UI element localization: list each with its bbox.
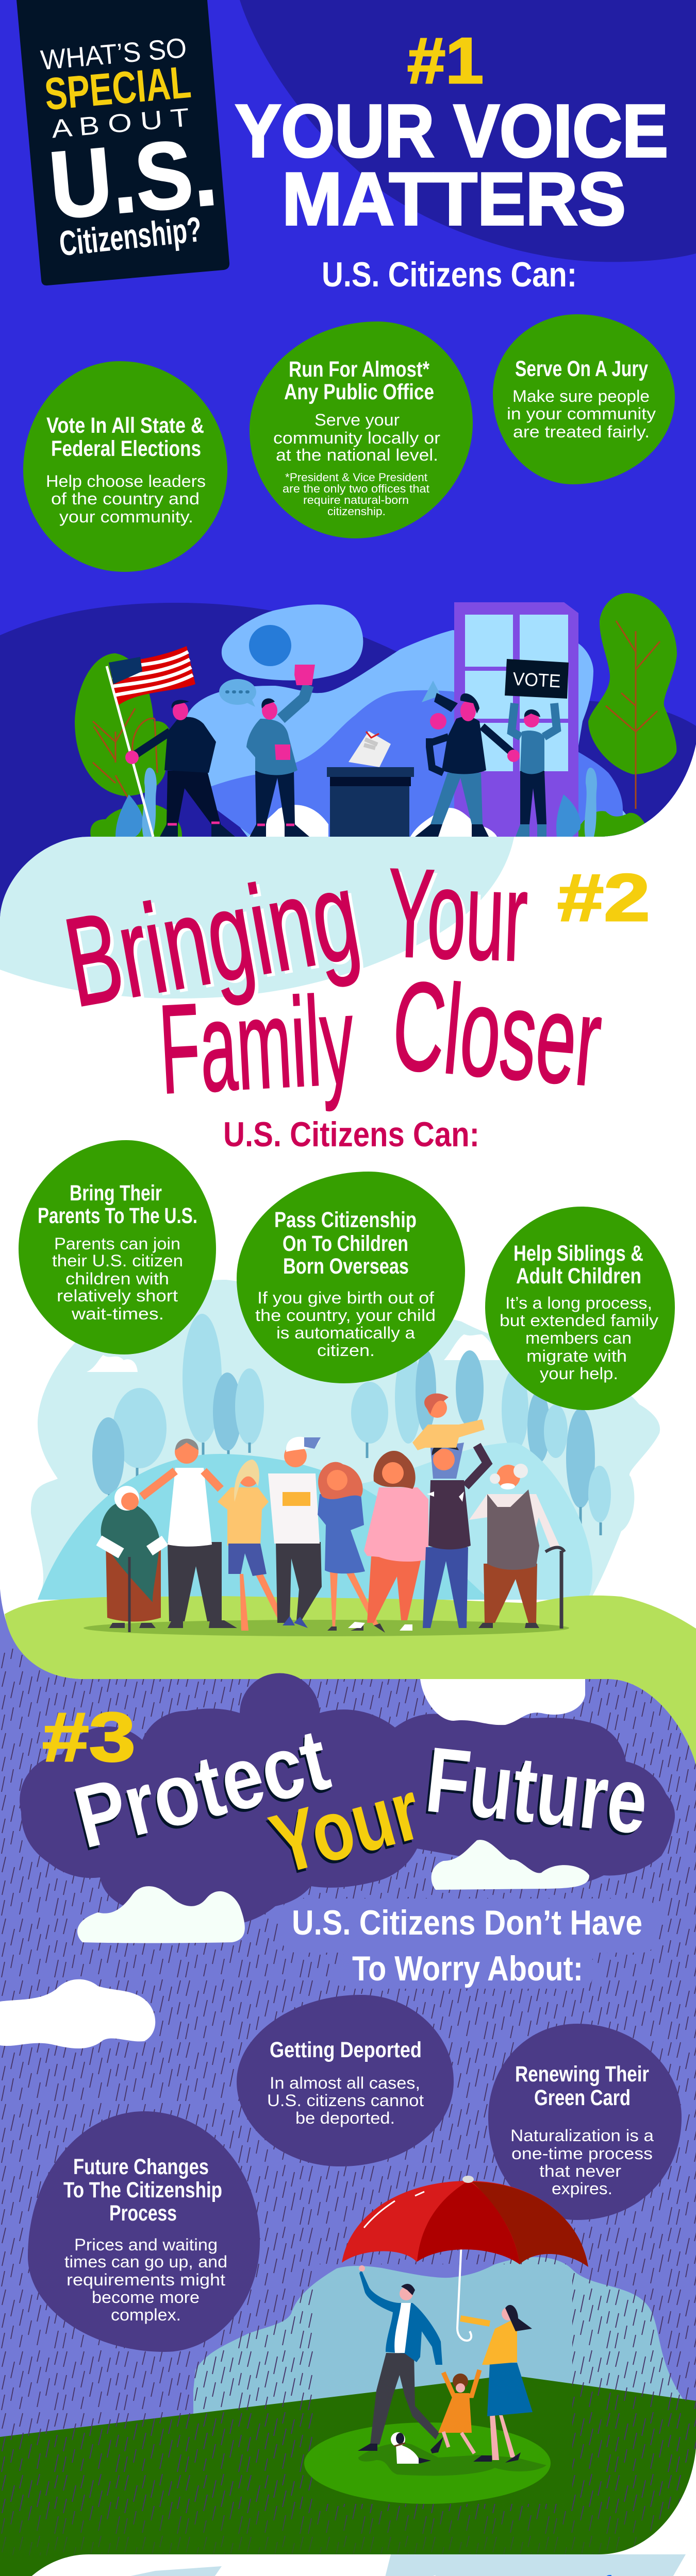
body text: If you give birth out of (257, 1289, 434, 1307)
heading: Born Overseas (283, 1254, 409, 1279)
body text: Prices and waiting (74, 2235, 218, 2254)
heading: Help Siblings & (513, 1241, 643, 1266)
heading: Serve On A Jury (515, 357, 648, 381)
body text (64, 2235, 227, 2324)
body text: requirements might (67, 2270, 225, 2289)
title line: citizenship: Citizenship? (57, 210, 204, 263)
body text (500, 1294, 658, 1383)
heading: Green Card (534, 2086, 631, 2110)
body text (510, 2126, 654, 2198)
panel: section 3 protect your future background (0, 1571, 696, 2576)
blonde girl (218, 1460, 284, 1631)
child (438, 2370, 479, 2453)
heading: Future Changes (73, 2155, 209, 2179)
heading: Renewing Their (515, 2062, 649, 2087)
heading: your voice matters: YOUR VOICE (235, 89, 668, 173)
body text (52, 1234, 183, 1323)
heading: protect your future: Your (260, 1765, 429, 1895)
number 2: #2 (557, 860, 650, 935)
number 3: #3 (42, 1698, 136, 1776)
heading: bringing your family closer: Your (385, 841, 530, 988)
heading: bringing your family closer: Bringing (59, 846, 372, 1036)
heading: Parents To The U.S. (38, 1204, 197, 1228)
subheading: citizens can: U.S. Citizens Can: (223, 1115, 479, 1154)
body text: of the country and (51, 489, 200, 508)
number 1: #1 (407, 24, 484, 97)
heading (46, 413, 204, 461)
woman in blue dress (318, 1462, 385, 1633)
cloud: right of heading (432, 1840, 589, 1890)
person with raised fist (246, 665, 315, 837)
vote sign: VOTE (512, 668, 561, 691)
pale blue blob behind heading (0, 835, 515, 998)
lawn shadow (358, 2443, 546, 2476)
title line: U.S.: U.S. (45, 119, 221, 239)
heading: On To Children (283, 1231, 408, 1256)
illustration: family under umbrella (342, 2176, 588, 2464)
person with megaphone (415, 681, 520, 837)
heading: Any Public Office (284, 380, 434, 404)
light blue wave (187, 630, 644, 837)
dog (391, 2432, 431, 2464)
woman (460, 2305, 533, 2463)
ground shadow (84, 1620, 569, 1636)
body text: that never (539, 2162, 621, 2180)
heading: Pass Citizenship (274, 1208, 417, 1232)
heading: protect your future: Your (261, 1762, 430, 1892)
heading: protect your future: Protect (64, 1713, 337, 1870)
heading: protect your future (64, 1710, 653, 1895)
body text: Parents can join (54, 1234, 180, 1253)
body text: in your community (507, 404, 656, 423)
white bumps (248, 805, 497, 837)
subheading: don't have to worry: To Worry About: (352, 1949, 583, 1988)
speech bubble (219, 679, 256, 707)
body text: U.S. citizens cannot (267, 2091, 424, 2110)
body text: Make sure people (512, 387, 650, 405)
leaves (115, 794, 581, 837)
cloud: top (420, 1679, 585, 1725)
callout: public office (250, 321, 473, 538)
man with cap (268, 1437, 322, 1628)
heading: Vote In All State & (46, 413, 204, 438)
tree right (588, 593, 677, 809)
callout: getting deported (237, 1995, 454, 2166)
man (358, 2265, 443, 2453)
footnote: *President & Vice President (285, 471, 427, 484)
body text (267, 2074, 424, 2127)
blue spot (249, 625, 291, 666)
body text: the country, your child (255, 1306, 436, 1325)
title line: special: SPECIAL (43, 56, 193, 120)
body text: migrate with (526, 1347, 627, 1365)
callout: pass citizenship (237, 1172, 465, 1383)
heading: bringing your family closer (56, 841, 607, 1120)
body text (46, 472, 206, 526)
heading: bringing your family closer: Family (156, 969, 357, 1120)
title card (16, 0, 229, 285)
heading: Federal Elections (51, 436, 201, 461)
heading (63, 2155, 222, 2226)
callout: future changes (28, 2111, 260, 2352)
storm cloud behind heading (20, 1673, 675, 1927)
ballot box (327, 731, 414, 837)
body text: members can (525, 1329, 632, 1347)
vote sign (505, 659, 569, 699)
grandfather (469, 1464, 565, 1629)
umbrella (342, 2176, 588, 2341)
small clouds (87, 1334, 502, 1372)
light blue cloud blob (222, 604, 363, 681)
body text: times can go up, and (64, 2252, 227, 2271)
tree left (75, 653, 171, 809)
lime ground (5, 1596, 696, 1765)
heading: your voice matters: MATTERS (282, 157, 626, 241)
footnote: require natural-born (303, 494, 409, 506)
callout: siblings (485, 1207, 675, 1410)
illustration: family group (99, 1394, 565, 1633)
body text: expires. (552, 2179, 612, 2198)
body text (507, 387, 656, 441)
heading (38, 1181, 197, 1228)
heading: bringing your family closer: Your (388, 845, 533, 991)
bushes (90, 804, 650, 837)
callout: jury (493, 314, 675, 484)
body text: their U.S. citizen (52, 1251, 183, 1270)
body text: your help. (540, 1364, 618, 1383)
heading: Run For Almost* (289, 357, 429, 382)
flag with pole (107, 646, 195, 837)
panel: section 2 white background (0, 721, 696, 1765)
man with child on shoulders (412, 1394, 487, 1628)
body text: wait-times. (71, 1304, 164, 1323)
subheading: don't have to worry (292, 1903, 642, 1988)
heading: Adult Children (516, 1264, 641, 1289)
body text: but extended family (500, 1311, 658, 1330)
tall man tank top (142, 1438, 237, 1628)
body text: Serve your (314, 411, 400, 429)
body text (273, 411, 440, 464)
body text: one-time process (511, 2144, 653, 2163)
heading: To The Citizenship (63, 2178, 222, 2202)
body text: become more (92, 2288, 200, 2307)
footnote: citizenship. (327, 505, 386, 518)
illustration: family background (31, 1280, 660, 1600)
subheading: citizens can: U.S. Citizens Can: (322, 255, 577, 294)
heading: your voice matters (235, 89, 668, 241)
mid hills (361, 1443, 592, 1600)
body text: complex. (111, 2306, 181, 2324)
footnote (283, 471, 429, 518)
person holding vote sign (505, 659, 569, 837)
woman in pink (348, 1451, 428, 1631)
body text (255, 1289, 436, 1360)
body text: relatively short (57, 1286, 178, 1305)
grandmother (99, 1486, 165, 1632)
body text: your community. (59, 507, 193, 526)
body text: be deported. (295, 2109, 395, 2127)
pale hill blob (31, 1280, 660, 1600)
title line: WHAT’S SO (39, 32, 188, 76)
subheading: don't have to worry: U.S. Citizens Don’t Have (292, 1903, 642, 1942)
green ellipse lawn (304, 2422, 551, 2504)
body text: children with (65, 1269, 169, 1288)
footnote: are the only two offices that (283, 482, 429, 495)
heading (274, 1208, 417, 1279)
body text: citizen. (317, 1341, 375, 1360)
heading: Bring Their (70, 1181, 162, 1206)
heading: bringing your family closer: Bringing (56, 843, 369, 1033)
illustration: voting scene (0, 593, 696, 927)
heading (284, 357, 434, 404)
background trees (92, 1314, 611, 1535)
callout: vote (23, 361, 227, 572)
title line: about: A B O U T (51, 103, 190, 144)
dark green ground (0, 2375, 696, 2576)
cloud: under heading (77, 1886, 245, 1943)
body text: In almost all cases, (270, 2074, 420, 2092)
body text: Naturalization is a (510, 2126, 654, 2145)
medium blue wave (209, 690, 623, 837)
dark hill (0, 603, 696, 927)
body text: are treated fairly. (513, 422, 650, 441)
heading (515, 2062, 649, 2110)
sheltered light blue area (193, 2257, 696, 2473)
heading: Process (109, 2201, 177, 2226)
body text: community locally or (273, 429, 440, 447)
door building (454, 602, 578, 837)
body text: is automatically a (276, 1324, 415, 1342)
dark circle top right (240, 0, 696, 262)
cloud: left (0, 1979, 155, 2048)
heading: protect your future: Protect (65, 1710, 338, 1867)
child (412, 1394, 485, 1450)
callout: green card (488, 2024, 682, 2220)
body text: at the national level. (276, 446, 438, 464)
heading (513, 1241, 643, 1289)
callout: bring parents (19, 1140, 216, 1354)
heading: Getting Deported (270, 2038, 422, 2062)
world map (131, 2554, 686, 2576)
panel: section 1 your voice matters background (0, 0, 696, 917)
body text: It’s a long process, (505, 1294, 652, 1312)
body text: Help choose leaders (46, 472, 206, 490)
person with flag (125, 700, 235, 837)
panel: section 4 travel background (0, 2448, 696, 2576)
